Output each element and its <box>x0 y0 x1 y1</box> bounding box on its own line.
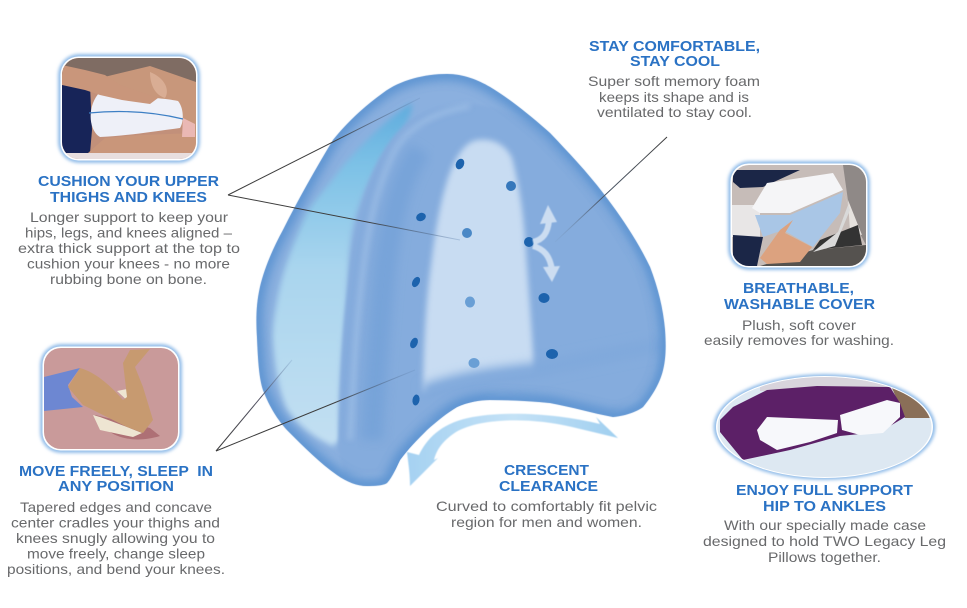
photo: hand on pillow <box>58 54 200 163</box>
text: crescent clearance: CLEARANCE <box>499 479 598 495</box>
text: cushion your upper thighs and knees: cushion your knees - no more <box>27 256 230 272</box>
text: move freely: positions, and bend your knees. <box>7 561 225 577</box>
text: enjoy full support <box>703 483 946 565</box>
text: enjoy full support: HIP TO ANKLES <box>763 499 886 515</box>
text: cushion your upper thighs and knees: Longer support to keep your <box>30 209 228 225</box>
text: cushion your upper thighs and knees: extra thick support at the top to <box>18 240 240 256</box>
text: cushion your upper thighs and knees <box>18 174 240 287</box>
text: crescent clearance: Curved to comfortably fit pelvic <box>436 498 657 514</box>
text: stay comfortable: Super soft memory foam <box>588 73 760 89</box>
text: enjoy full support: ENJOY FULL SUPPORT <box>736 483 913 499</box>
icon: airflow arrows <box>533 205 560 282</box>
text: enjoy full support: With our specially made case <box>724 517 926 533</box>
text: stay comfortable: STAY COMFORTABLE, <box>589 39 760 55</box>
text: breathable washable cover <box>704 281 894 348</box>
arrow: crescent clearance <box>407 414 618 486</box>
text: move freely: MOVE FREELY, SLEEP IN <box>19 464 213 480</box>
photo: leg on pillow <box>40 344 182 453</box>
leader lines: cushion <box>228 98 460 240</box>
text: move freely: knees snugly allowing you to <box>16 530 215 546</box>
text: stay comfortable: STAY COOL <box>630 54 720 70</box>
inner face <box>336 128 476 471</box>
text: enjoy full support: designed to hold TWO Legacy Leg <box>703 533 946 549</box>
text: stay comfortable: keeps its shape and is <box>599 89 749 105</box>
text: crescent clearance <box>436 463 657 530</box>
leader lines: move freely <box>216 360 415 451</box>
text: breathable washable cover: easily removes for washing. <box>704 332 894 348</box>
photo: two pillows in case <box>714 374 936 480</box>
text: move freely: center cradles your thighs and <box>11 514 220 530</box>
text: stay comfortable <box>588 39 760 120</box>
text: enjoy full support: Pillows together. <box>768 549 881 565</box>
text: cushion your upper thighs and knees: THIGHS AND KNEES <box>50 190 207 206</box>
text: move freely: move freely, change sleep <box>27 546 205 562</box>
text: crescent clearance: CRESCENT <box>504 463 589 479</box>
text: stay comfortable: ventilated to stay cool. <box>597 104 752 120</box>
text: breathable washable cover: BREATHABLE, <box>743 281 854 297</box>
left face highlight <box>273 103 412 446</box>
photo: removing cover <box>728 161 870 270</box>
text: move freely <box>7 464 225 577</box>
text: move freely: ANY POSITION <box>58 479 174 495</box>
text: cushion your upper thighs and knees: rubbing bone on bone. <box>50 271 207 287</box>
text: cushion your upper thighs and knees: hips, legs, and knees aligned – <box>25 224 232 240</box>
leader line: stay cool <box>555 137 667 242</box>
pillow illustration <box>256 74 666 486</box>
bottom and outer edge shading <box>422 358 538 394</box>
text: move freely: Tapered edges and concave <box>20 499 212 515</box>
text: crescent clearance: region for men and women. <box>451 514 642 530</box>
ventilation holes <box>409 157 558 406</box>
text: breathable washable cover: Plush, soft cover <box>742 317 856 333</box>
text: breathable washable cover: WASHABLE COVER <box>724 297 876 313</box>
text: cushion your upper thighs and knees: CUSHION YOUR UPPER <box>38 174 220 190</box>
center highlight <box>423 140 534 392</box>
